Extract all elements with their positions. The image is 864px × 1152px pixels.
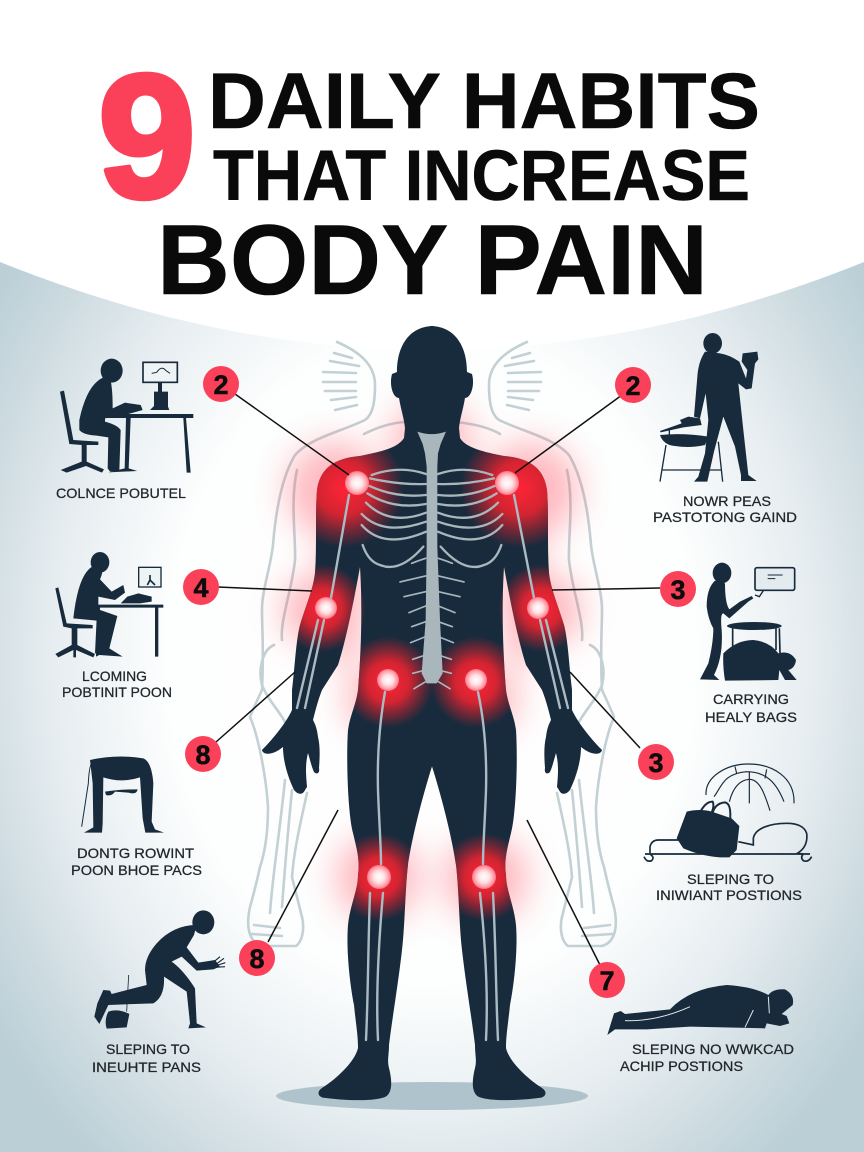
badge 8 left — [185, 736, 221, 772]
red glow on body — [297, 450, 567, 920]
badge 7: 7 — [599, 966, 615, 996]
skeleton: spine and ribs — [362, 432, 502, 689]
badge 3 lower right: 3 — [648, 748, 664, 778]
label: carrying heavy bags: CARRYING — [713, 691, 789, 707]
badge 4 left — [183, 569, 219, 605]
label: bag on bed frame — [656, 871, 802, 903]
callout leader lines — [216, 394, 660, 965]
badge 2 right — [615, 367, 651, 403]
pain glow halo behind body — [282, 400, 582, 920]
floor shadow — [276, 1082, 588, 1110]
badge 2 left — [203, 366, 239, 402]
label: carrying heavy bags — [705, 691, 797, 725]
title numeral 9: 9 — [98, 39, 196, 235]
icon: kneeling and reaching — [94, 910, 225, 1029]
label: kneeling: INEUHTE PANS — [92, 1059, 201, 1075]
icon: lying prone — [607, 985, 793, 1035]
label: lying prone: SLEPING NO WWKCAD — [632, 1041, 794, 1057]
label: bending forward — [71, 845, 202, 878]
pain point markers — [315, 471, 549, 889]
badge 8 lower left — [239, 940, 275, 976]
label: bag on bed frame: INIWIANT POSTIONS — [656, 887, 802, 903]
icon: leaning over laptop at desk — [55, 552, 163, 657]
label: lying prone — [620, 1041, 794, 1074]
nerve lines in limbs — [297, 495, 568, 1040]
human body silhouette — [262, 326, 602, 1100]
label: leaning over laptop: LCOMING — [82, 668, 147, 684]
label: carrying heavy bags: HEALY BAGS — [705, 709, 797, 725]
label: bending forward: DONTG ROWINT — [77, 845, 194, 861]
icon: carrying heavy bags — [700, 563, 797, 681]
number badges — [183, 366, 696, 998]
icon: bending forward — [82, 757, 164, 833]
label: standing person: PASTOTONG GAIND — [653, 509, 797, 525]
icon: standing person lifting over table — [660, 333, 758, 482]
label: bending forward: POON BHOE PACS — [71, 862, 202, 878]
icon: person at desk computer — [60, 359, 193, 473]
badge 3 lower right — [638, 744, 674, 780]
label: kneeling — [92, 1041, 201, 1075]
badge 3 right — [660, 571, 696, 607]
label: standing person: NOWR PEAS — [683, 493, 771, 509]
label: lying prone: ACHIP POSTIONS — [620, 1058, 743, 1074]
label: desk computer: COLNCE POBUTEL — [56, 485, 186, 501]
icon: bag on bed frame — [644, 764, 812, 861]
ghost body outlines — [248, 342, 616, 946]
label: kneeling: SLEPING TO — [106, 1041, 190, 1057]
badge 8 lower left: 8 — [249, 944, 265, 974]
label: leaning over laptop — [62, 668, 172, 700]
badge 7 — [589, 962, 625, 998]
badge 2 left: 2 — [213, 370, 229, 400]
title line 1: DAILY HABITS — [208, 56, 760, 145]
title line 2: THAT INCREASE — [213, 137, 750, 216]
label: leaning over laptop: POBTINIT POON — [62, 684, 172, 700]
label: standing person — [653, 493, 797, 525]
badge 8 left: 8 — [195, 740, 211, 770]
title line 3: BODY PAIN — [157, 204, 708, 315]
badge 3 right: 3 — [670, 575, 686, 605]
badge 4 left: 4 — [193, 573, 209, 603]
title — [98, 39, 760, 315]
badge 2 right: 2 — [625, 371, 641, 401]
label: bag on bed frame: SLEPING TO — [687, 871, 774, 887]
